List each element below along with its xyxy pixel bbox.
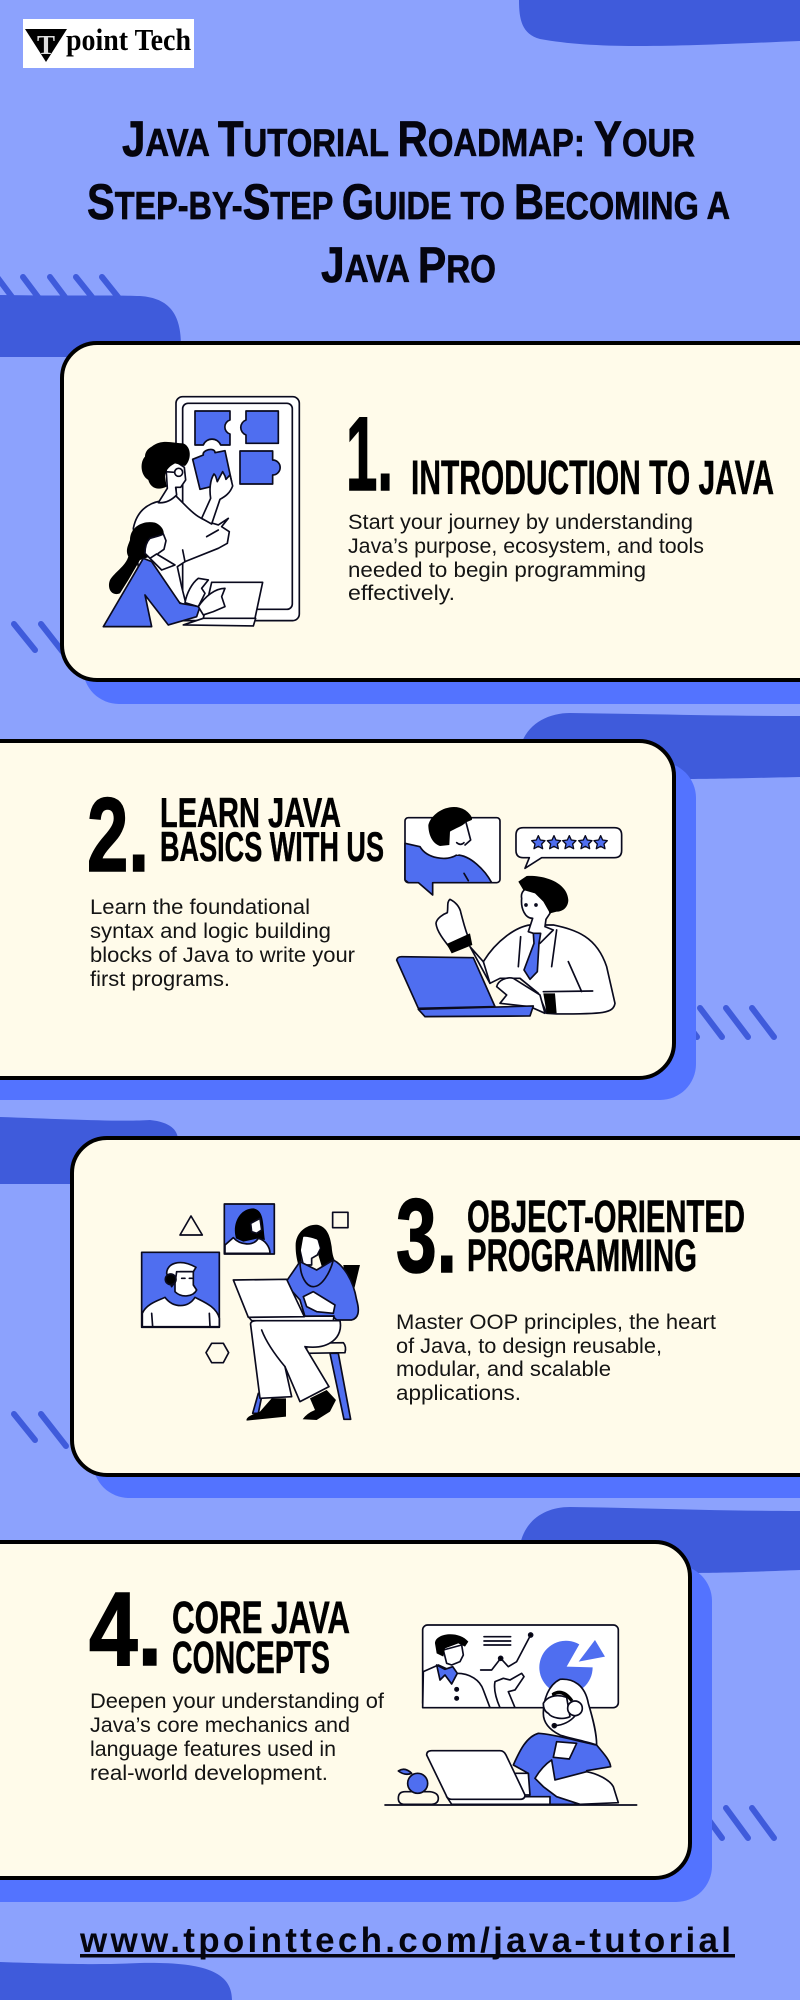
step description 1: Start your journey by understanding <box>348 511 693 534</box>
title: JAVA TUTORIAL ROADMAP: YOUR <box>122 111 695 167</box>
title: JAVA PRO <box>321 237 496 293</box>
step description 2: blocks of Java to write your <box>90 944 355 967</box>
step description 1 <box>348 511 704 605</box>
title <box>87 111 730 293</box>
step description 2 <box>90 896 355 991</box>
step heading 4: CONCEPTS <box>172 1632 330 1683</box>
title: STEP-BY-STEP GUIDE TO BECOMING A <box>87 174 730 230</box>
panel: step 3 object-oriented programming <box>72 1138 800 1498</box>
step description 4: Java’s core mechanics and <box>90 1714 350 1737</box>
logo: point Tech <box>66 22 191 57</box>
illustration: woman on laptop in video meeting <box>142 1204 360 1421</box>
step heading 2: LEARN JAVA <box>160 789 341 836</box>
step description 4: real-world development. <box>90 1762 328 1785</box>
step number 3: 3. <box>396 1178 457 1295</box>
step description 3: modular, and scalable <box>396 1358 611 1381</box>
step description 1: Java’s purpose, ecosystem, and tools <box>348 535 704 558</box>
step description 3 <box>396 1311 716 1405</box>
panel: step 2 learn Java basics <box>0 741 696 1100</box>
step number 4: 4. <box>89 1571 162 1688</box>
panel: step 1 introduction to Java <box>62 343 800 704</box>
logo <box>23 19 194 68</box>
step description 4 <box>90 1690 384 1785</box>
step heading 4: CORE JAVA <box>172 1592 350 1643</box>
step description 1: effectively. <box>348 582 455 605</box>
footer url: www.tpointtech.com/java-tutorial <box>79 1921 731 1960</box>
illustration: man at laptop with video call and rating <box>397 807 622 1017</box>
panel: step 4 core Java concepts <box>0 1542 712 1902</box>
step description 3: Master OOP principles, the heart <box>396 1311 716 1334</box>
step number 1: 1. <box>346 396 393 513</box>
step heading 4 <box>172 1592 350 1683</box>
step heading 2 <box>160 789 384 870</box>
logo: T <box>37 30 55 60</box>
step description 3: of Java, to design reusable, <box>396 1335 662 1358</box>
step description 2: first programs. <box>90 968 230 991</box>
step number 2: 2. <box>87 777 149 894</box>
step heading 2: BASICS WITH US <box>160 823 384 870</box>
illustration: support agent with presentation screen <box>385 1625 637 1805</box>
step description 4: language features used in <box>90 1738 336 1761</box>
illustration: team solving puzzle on phone <box>103 397 299 627</box>
step description 3: applications. <box>396 1382 521 1405</box>
step description 4: Deepen your understanding of <box>90 1690 384 1713</box>
step description 1: needed to begin programming <box>348 559 646 582</box>
step heading 3 <box>467 1191 745 1281</box>
step description 2: syntax and logic building <box>90 920 331 943</box>
step description 2: Learn the foundational <box>90 896 310 919</box>
